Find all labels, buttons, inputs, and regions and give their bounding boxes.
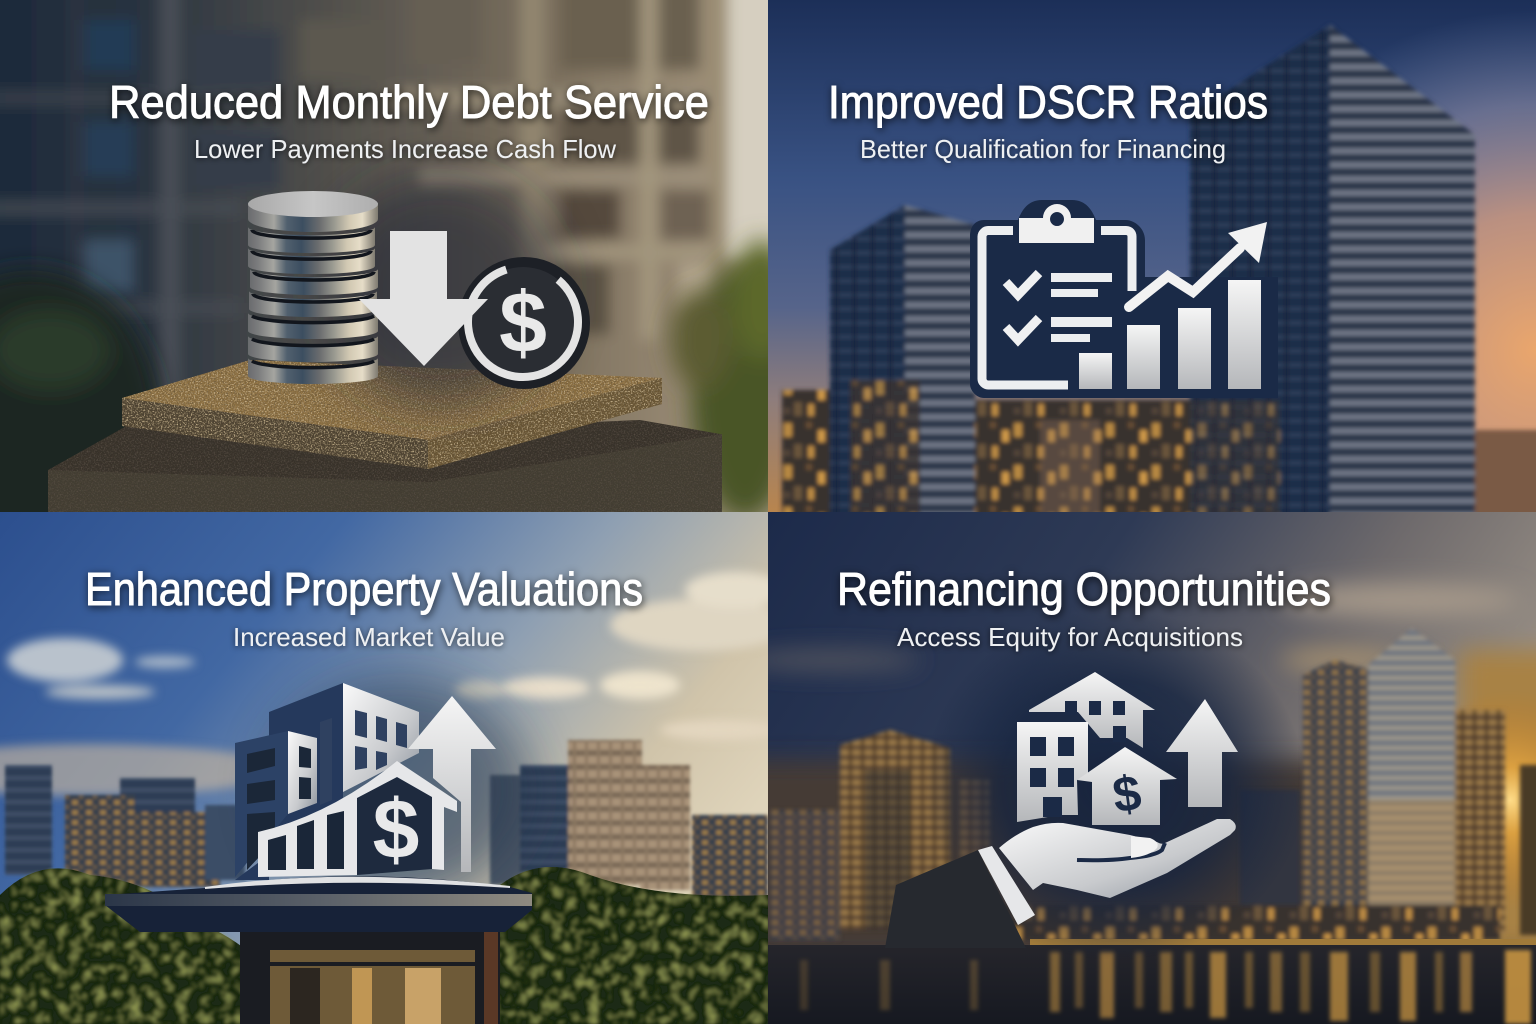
icon: coin stack — [248, 191, 378, 384]
growth arrow — [1129, 222, 1267, 307]
granite plinth: upper slab — [122, 360, 662, 469]
shading behind icon — [270, 680, 530, 900]
clipboard clip — [1019, 204, 1094, 243]
panel: improved dscr ratios — [768, 0, 1536, 540]
panel: refinancing opportunities — [740, 512, 1536, 1024]
title: Refinancing Opportunities — [837, 563, 1331, 615]
icon: front building — [235, 731, 317, 877]
subtitle: Lower Payments Increase Cash Flow — [194, 134, 616, 164]
checklist — [1006, 273, 1039, 340]
water with reflections — [768, 939, 1536, 1024]
title: Reduced Monthly Debt Service — [109, 76, 709, 128]
title: Enhanced Property Valuations — [85, 563, 643, 615]
title: Improved DSCR Ratios — [828, 76, 1268, 128]
dusk sky — [768, 0, 1536, 512]
icon: small house with dollar — [1077, 747, 1177, 825]
icon: dollar coin: $ — [499, 275, 547, 371]
subtitle: Better Qualification for Financing — [860, 134, 1226, 164]
sun glow — [1400, 690, 1536, 910]
blurred apartment building background — [0, 0, 768, 512]
twilight sky — [768, 512, 1536, 945]
icon: dollar coin — [458, 257, 590, 389]
shadow behind icon — [320, 175, 560, 405]
icon: up arrow — [1166, 699, 1238, 807]
trees left and right — [0, 867, 768, 1024]
icon: hand — [999, 819, 1236, 898]
clipboard outline — [982, 230, 1132, 385]
blurred skyline — [782, 25, 1536, 540]
panel: enhanced property valuations — [0, 512, 790, 1024]
icon: apartment house behind — [1029, 672, 1155, 748]
checklist lines — [1051, 273, 1112, 342]
daytime sky — [0, 512, 768, 946]
blurred clouds and horizon — [740, 584, 1536, 960]
subtitle: Access Equity for Acquisitions — [897, 622, 1243, 652]
icon: down arrow — [359, 231, 488, 366]
lower building: roof and storefront — [105, 876, 532, 1024]
granite plinth: lower block — [48, 420, 722, 512]
icon: small house with dollar: $ — [1109, 764, 1145, 824]
panel: reduced monthly debt service — [0, 0, 768, 512]
icon: office building — [1017, 722, 1088, 822]
icon base curve — [205, 878, 510, 888]
distant city blocks — [5, 740, 768, 900]
foliage left and right — [0, 224, 768, 512]
icon backing — [970, 200, 1278, 398]
icon: house with dollar sign — [258, 761, 457, 877]
icon: sleeve and cuff — [885, 846, 1035, 948]
subtitle: Increased Market Value — [233, 622, 505, 652]
dark halo behind icon — [925, 610, 1305, 960]
icon: house with dollar sign: $ — [373, 782, 419, 876]
blurred skyline — [770, 628, 1536, 940]
icon: clipboard and growth chart — [970, 200, 1278, 398]
icon: up arrow — [408, 696, 496, 872]
icon: back building — [235, 683, 419, 880]
clouds — [0, 572, 790, 796]
bar chart — [1079, 280, 1261, 389]
